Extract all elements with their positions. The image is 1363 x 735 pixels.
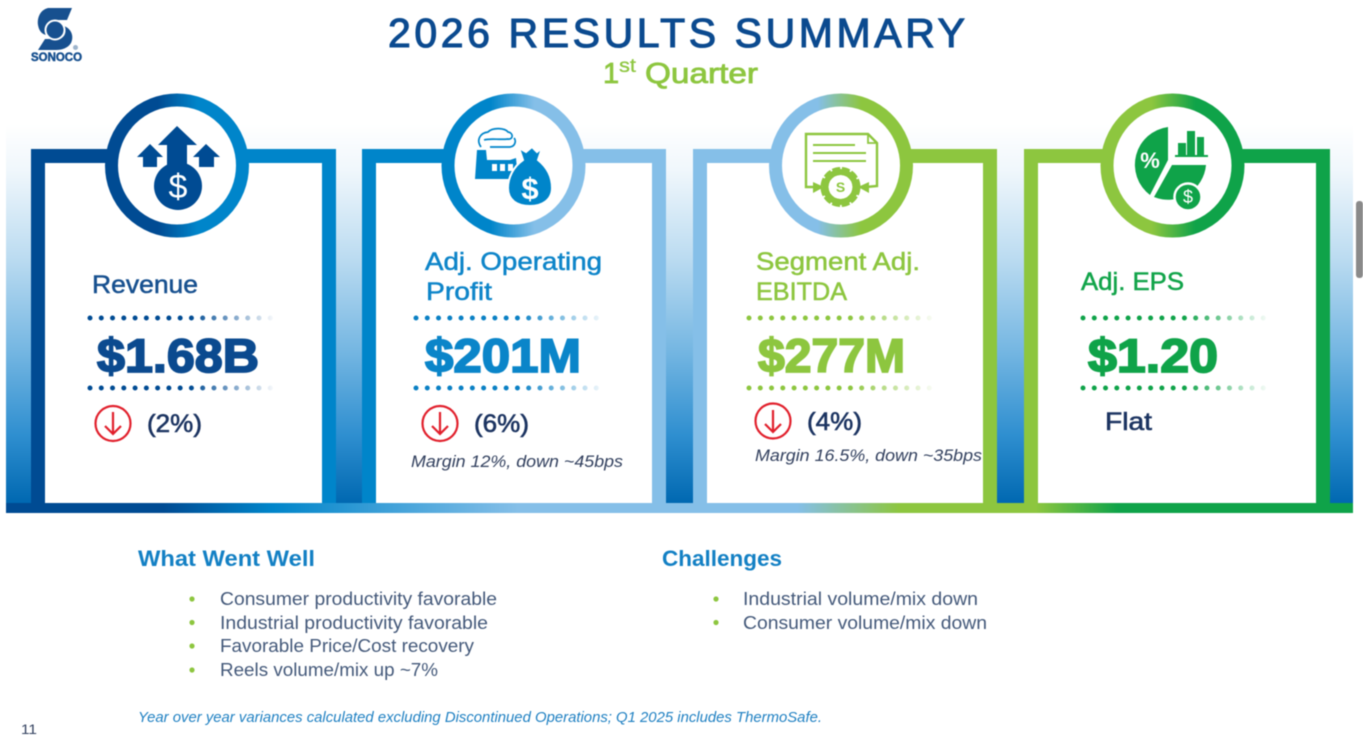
icon: factory and money bag: $ [521,171,539,206]
panel: what went well [138,546,497,680]
subtitle: st [619,56,637,77]
icon: certificate [806,134,877,203]
bullet list: Industrial volume/mix down [743,589,978,609]
footnote: Year over year variances calculated excluding Discontinued Operations; Q1 2025 includes ThermoSafe. [138,710,822,726]
bullet list [713,589,987,633]
bullet list: Industrial productivity favorable [220,613,488,633]
label: EBITDA [756,278,847,306]
label [425,248,602,306]
value: $1.20 [1088,329,1218,382]
panel: adjusted operating profit [362,100,666,505]
change: (4%) [807,408,862,436]
card frame [693,149,997,505]
dotted divider bottom [1083,386,1266,390]
heading: What Went Well [138,546,315,571]
label: Adj. EPS [1081,268,1184,296]
icon ring [448,100,579,231]
dotted divider top [749,316,933,320]
bullet list: Favorable Price/Cost recovery [220,636,474,656]
value: $277M [758,329,905,382]
icon: factory and money bag [475,129,552,206]
card frame [31,149,336,505]
bullet list [189,589,497,680]
icon: arrows and dollar coin: $ [169,168,188,206]
browser scrollbar [1356,201,1363,278]
margin note: Margin 16.5%, down ~35bps [755,446,983,465]
icon ring [776,100,906,231]
card interior [707,163,983,503]
card interior [376,163,652,503]
subtitle: 1 [603,58,619,90]
bullet list: Consumer productivity favorable [220,589,497,609]
bullet list: Consumer volume/mix down [743,613,987,633]
label [756,248,920,306]
icon: down arrow [422,406,458,441]
label: Profit [426,278,492,306]
gradient background band [6,125,1353,505]
card interior [1038,163,1316,503]
panel: challenges [662,546,987,633]
change: (2%) [147,410,202,438]
dotted divider top [416,316,602,320]
logo [31,8,82,64]
icon: arrows and dollar coin [137,126,220,210]
card frame [1024,149,1330,505]
label: Adj. Operating [425,248,602,276]
label: Segment Adj. [756,248,920,276]
icon: down arrow [96,406,130,441]
icon: pie chart with bars and coin: $ [1183,187,1193,207]
dotted divider top [90,316,272,320]
icon: pie chart with bars and coin: % [1140,148,1160,173]
panel: revenue [31,100,336,505]
heading: Challenges [662,546,782,571]
value: $201M [425,329,581,382]
icon ring [112,100,242,231]
icon: down arrow [756,404,790,438]
subtitle [603,56,758,90]
dotted divider bottom [416,386,602,390]
subtitle: Quarter [645,58,758,90]
card frame [362,149,666,505]
card interior [45,163,322,503]
dotted divider bottom [90,386,272,390]
change: Flat [1105,408,1152,436]
panel: adjusted EPS [1024,100,1330,505]
panel: segment adjusted EBITDA [693,100,997,505]
dotted divider top [1083,316,1266,320]
value: $1.68B [97,329,259,382]
icon: certificate: S [836,179,845,195]
bottom gradient bar [6,503,1353,513]
bullet list: Reels volume/mix up ~7% [220,660,438,680]
title: 2026 RESULTS SUMMARY [388,10,965,56]
label: Revenue [92,271,198,299]
logo: SONOCO [31,52,82,64]
change: (6%) [474,410,529,438]
margin note: Margin 12%, down ~45bps [411,452,624,471]
dotted divider bottom [749,386,933,390]
icon: pie chart with bars and coin [1135,127,1208,210]
icon ring [1107,100,1238,231]
